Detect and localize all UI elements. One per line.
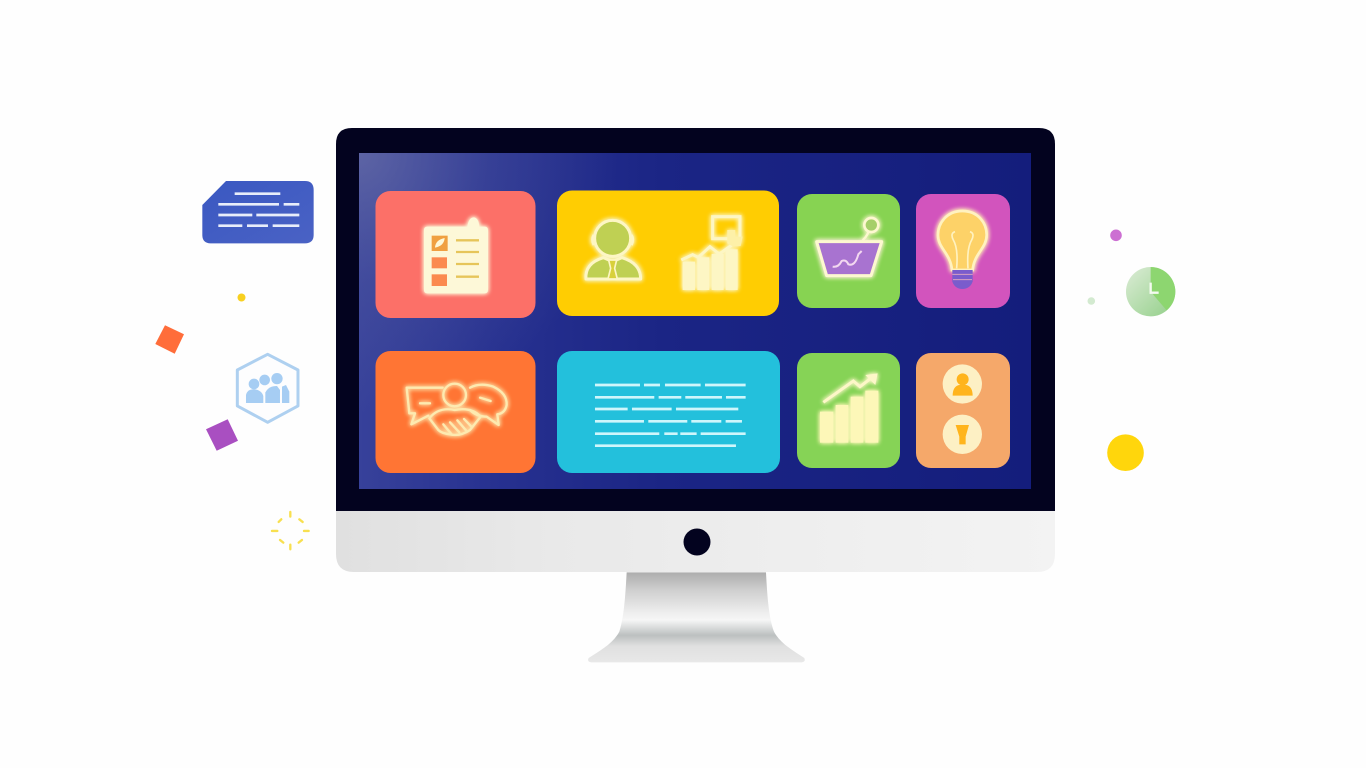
floating card: text note [202, 181, 314, 243]
tile: advisor and growth [557, 190, 779, 316]
floating square: purple [206, 419, 238, 451]
tile: text block [557, 351, 780, 473]
tile: profile and funnel [916, 353, 1010, 468]
monitor chin [336, 505, 1055, 572]
floating hexagon: team [237, 354, 298, 422]
tile: handshake and chat [376, 351, 536, 473]
tile: bowl chart [797, 194, 900, 308]
floating square: orange [155, 325, 184, 354]
monitor bezel [336, 128, 1055, 511]
icon: person with headset [586, 220, 641, 279]
icon: profile badge [943, 364, 982, 404]
floating sparkle: yellow [272, 512, 309, 549]
icon: bowl with trend line [817, 218, 882, 276]
camera [684, 528, 710, 556]
floating dot: yellow small [238, 294, 246, 302]
text lines [595, 385, 746, 446]
floating icon: clock [1126, 267, 1175, 316]
icon: growth chart [681, 217, 743, 290]
tile: light bulb [916, 194, 1010, 308]
icon: handshake with speech bubbles [407, 384, 507, 435]
tile: bar chart [797, 353, 900, 468]
floating dot: purple [1110, 230, 1122, 241]
monitor stand [588, 572, 805, 662]
icon: rising bar chart [820, 373, 878, 443]
icon: checklist [424, 217, 488, 293]
screen [359, 153, 1031, 489]
icon: light bulb [938, 211, 987, 289]
floating dot: pale green [1088, 297, 1095, 305]
tile: checklist [376, 191, 536, 318]
floating dot: yellow large [1107, 434, 1144, 471]
icon: funnel badge [943, 415, 982, 454]
